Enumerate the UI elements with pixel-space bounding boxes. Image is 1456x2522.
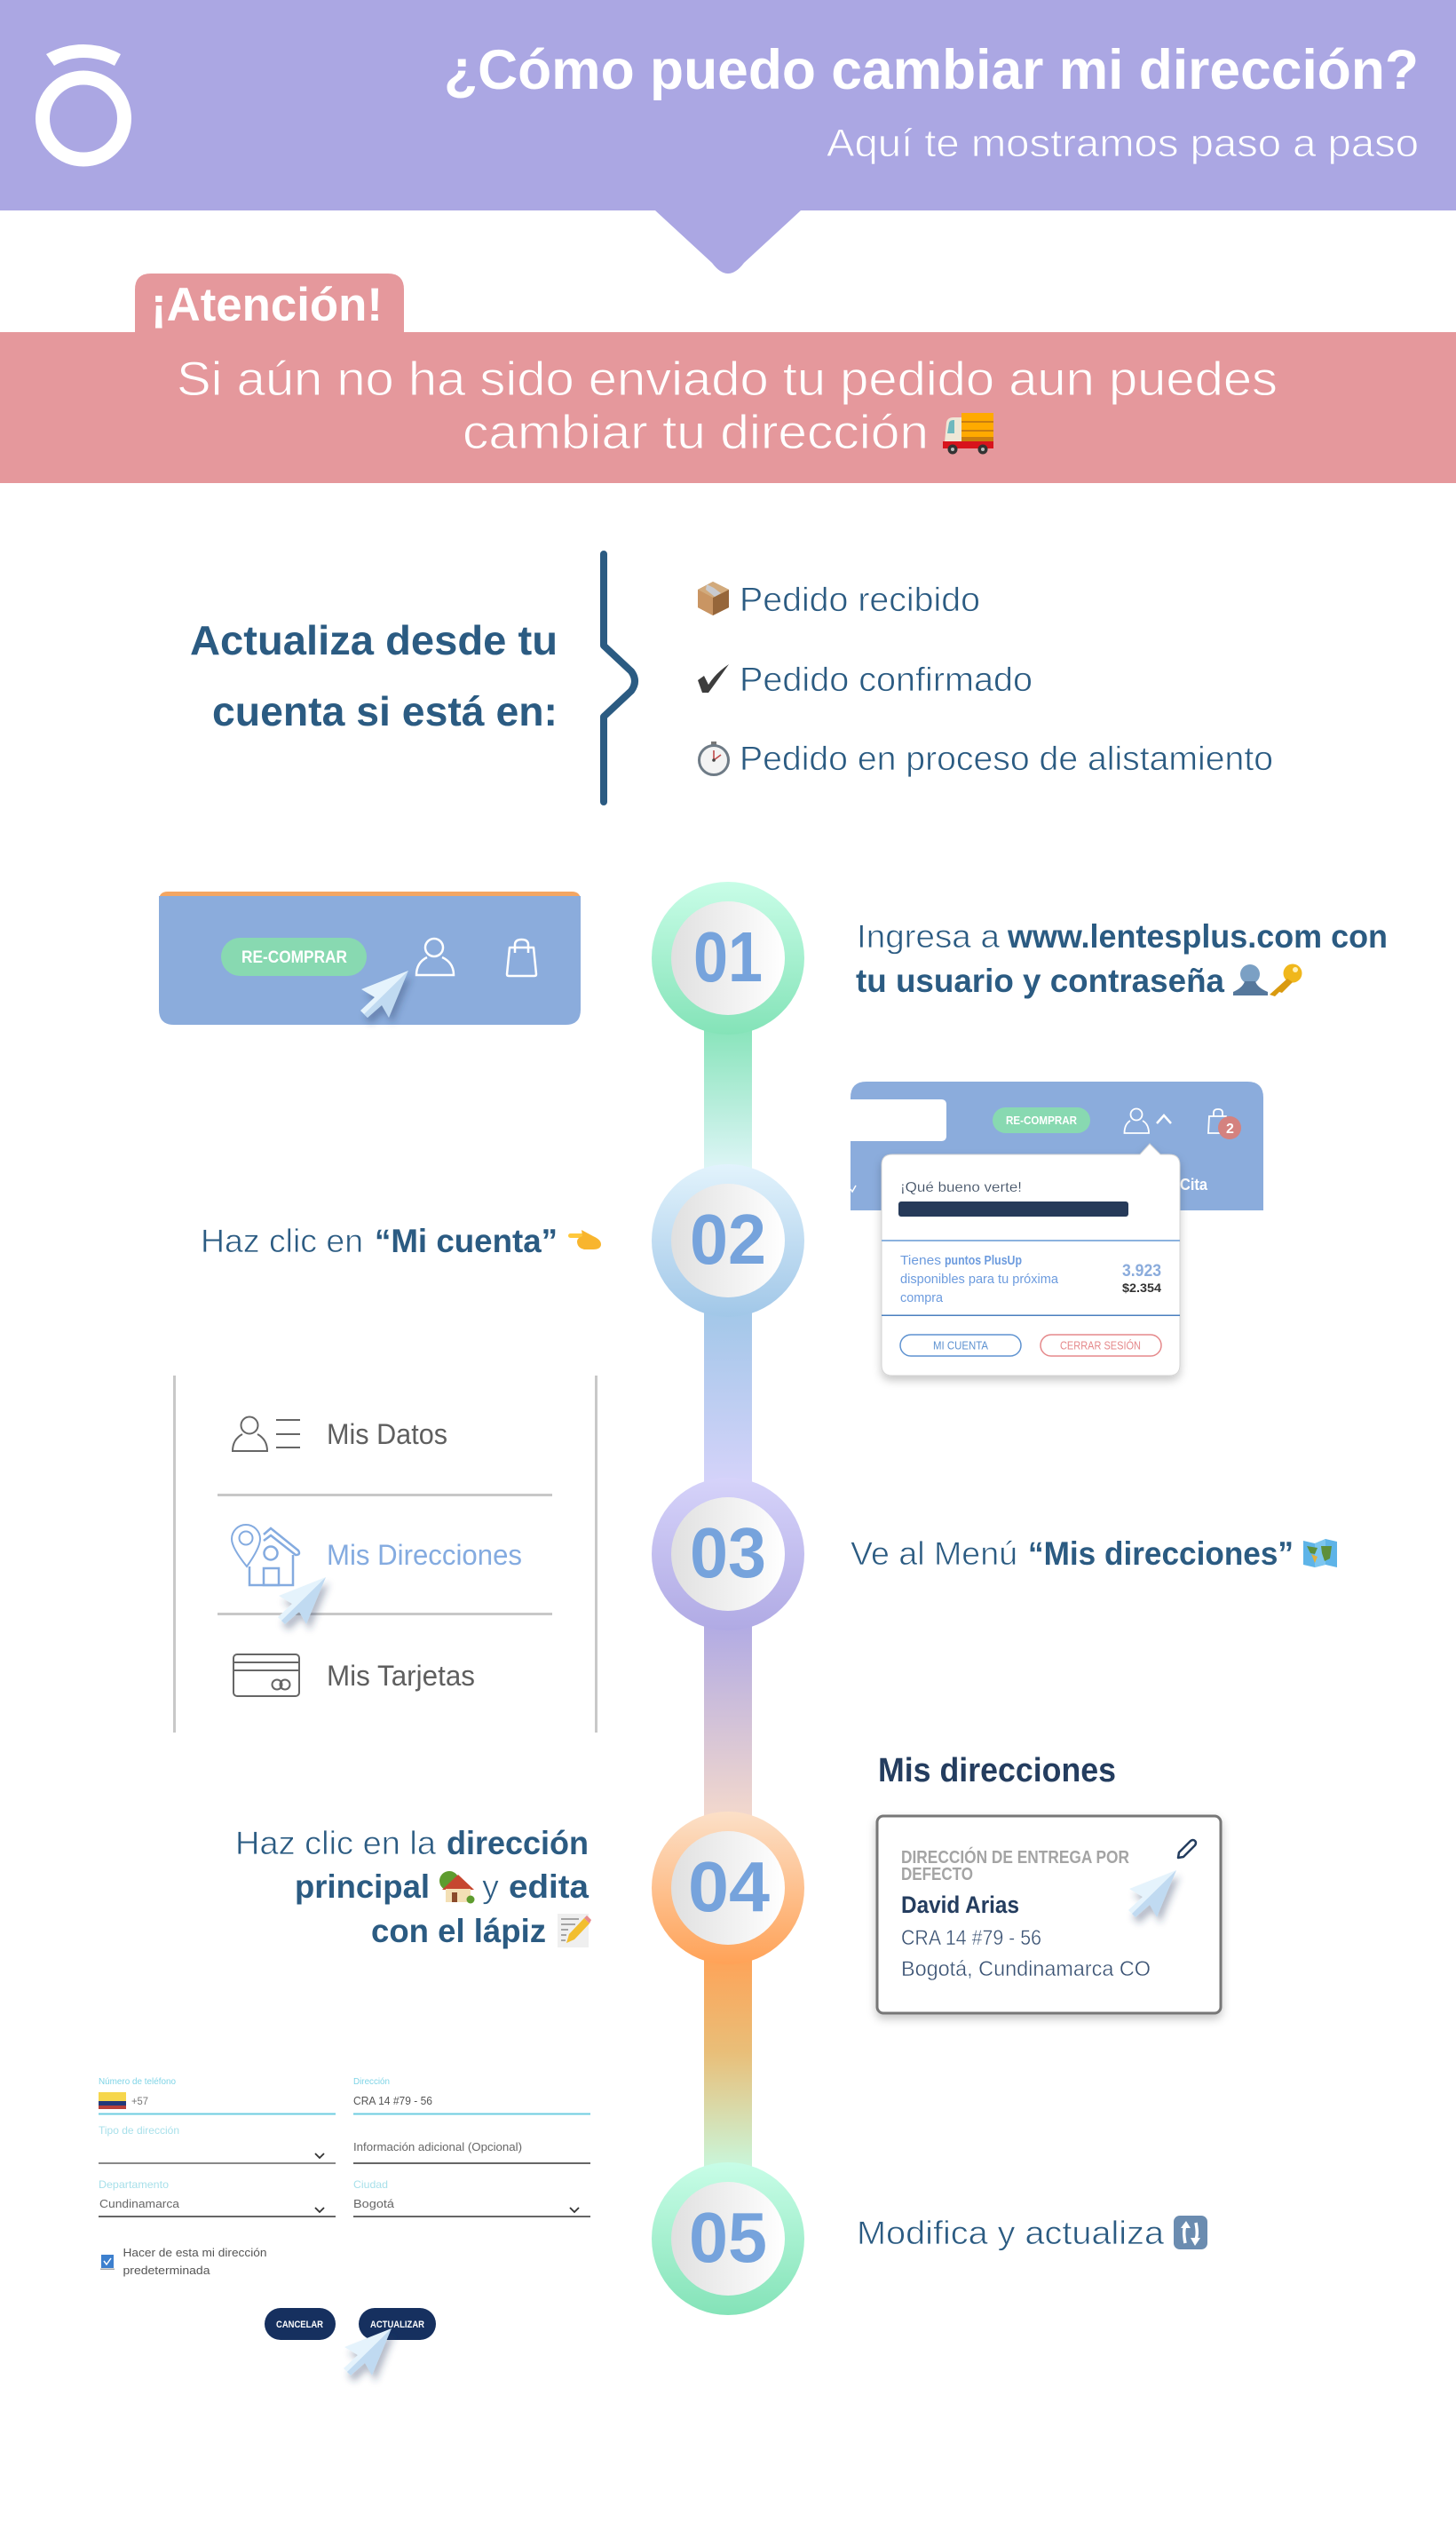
- panel: step 1 navbar screenshot: [159, 892, 581, 1025]
- field: phone: [99, 2076, 336, 2115]
- button: mi cuenta: MI CUENTA: [933, 1339, 989, 1352]
- icon: update arrows: [1174, 2216, 1207, 2249]
- points text: [900, 1254, 1059, 1305]
- attention text: cambiar tu dirección: [463, 406, 929, 459]
- text: step 5: Modifica y actualiza: [857, 2215, 1164, 2251]
- step marker 02: [652, 1164, 804, 1317]
- field: address: CRA 14 #79 - 56: [353, 2095, 432, 2107]
- address card: [877, 1816, 1221, 2013]
- text: step 4: [235, 1825, 589, 1949]
- panel: step 3 account menu: [173, 1376, 597, 1733]
- icon: memo with pencil: [558, 1914, 591, 1947]
- field: address type: [99, 2124, 336, 2164]
- checkbox: default address: predeterminada: [123, 2264, 210, 2277]
- field: additional info: Información adicional (Opcional): [353, 2141, 522, 2153]
- heading: attention: ¡Atención!: [151, 279, 383, 331]
- button: actualizar: [359, 2308, 436, 2340]
- field: city: Ciudad: [353, 2178, 388, 2191]
- panel: step 4 address card: [877, 1752, 1221, 2013]
- heading: update from account: cuenta si está en:: [212, 688, 558, 734]
- points text: puntos PlusUp: [945, 1254, 1022, 1268]
- address details: DEFECTO: [901, 1865, 973, 1884]
- field: city: Bogotá: [353, 2198, 394, 2210]
- status: in preparation: Pedido en proceso de alistamiento: [740, 741, 1273, 778]
- field: department: [99, 2178, 336, 2217]
- heading: mis direcciones: Mis direcciones: [878, 1752, 1116, 1789]
- menu item: mis tarjetas: Mis Tarjetas: [327, 1660, 475, 1692]
- timeline connector bars: [704, 1021, 752, 2171]
- button: actualizar: ACTUALIZAR: [370, 2320, 424, 2330]
- button: re-comprar small: RE-COMPRAR: [1006, 1114, 1078, 1127]
- icon: cart with badge: 2: [1226, 1122, 1234, 1137]
- step marker 01: 01: [693, 917, 763, 996]
- checkbox: default address: Hacer de esta mi dirección: [123, 2246, 266, 2259]
- panel: attention banner: [0, 274, 1456, 483]
- address details: CRA 14 #79 - 56: [901, 1926, 1041, 1950]
- menu item: mis direcciones: Mis Direcciones: [327, 1539, 522, 1571]
- button: cancelar: [265, 2308, 336, 2340]
- text: step 1: tu usuario y contraseña: [856, 963, 1224, 999]
- field: department: Departamento: [99, 2178, 169, 2191]
- button: cerrar sesion: [1041, 1335, 1161, 1356]
- points text: disponibles para tu próxima: [900, 1273, 1059, 1287]
- points value: [1122, 1262, 1161, 1295]
- text: step 3: “Mis direcciones”: [1028, 1535, 1294, 1572]
- points text: Tienes: [900, 1254, 941, 1268]
- menu item: mis datos: Mis Datos: [327, 1418, 447, 1450]
- field: phone: Número de teléfono: [99, 2076, 176, 2087]
- search box: [851, 1099, 946, 1141]
- icon: cursor: [1128, 1870, 1176, 1917]
- dropdown card: [882, 1144, 1180, 1376]
- icon: user: [416, 939, 454, 975]
- icon: cart with badge: [1208, 1109, 1241, 1139]
- points value: $2.354: [1122, 1281, 1161, 1295]
- text: step 4: dirección: [447, 1825, 589, 1861]
- brace: [604, 554, 635, 802]
- status: confirmed: Pedido confirmado: [740, 662, 1033, 699]
- icon: cursor: [278, 1577, 326, 1624]
- panel: header banner: [0, 0, 1456, 274]
- text: step 3: Ve al Menú: [851, 1535, 1017, 1572]
- button: re-comprar: RE-COMPRAR: [241, 948, 347, 967]
- icon: house with tree: [439, 1871, 474, 1904]
- step marker 04: [652, 1812, 804, 1964]
- greeting: ¡Qué bueno verte!: [900, 1180, 1022, 1195]
- button: cancelar: CANCELAR: [276, 2320, 323, 2330]
- panel: order status section: [190, 554, 1273, 802]
- attention text: Si aún no ha sido enviado tu pedido aun puedes: [177, 353, 1278, 406]
- address details: David Arias: [901, 1892, 1019, 1918]
- text: step 4: con el lápiz: [371, 1913, 546, 1949]
- checkbox: default address: [100, 2246, 266, 2277]
- menu item: mis direcciones: [232, 1525, 522, 1585]
- text: step 3: [851, 1535, 1294, 1572]
- nav label: cita: Cita: [1180, 1176, 1208, 1194]
- address details: [901, 1846, 1151, 1981]
- text: step 4: edita: [509, 1868, 589, 1905]
- attention text: [177, 353, 1278, 459]
- menu item: mis datos: [233, 1417, 447, 1451]
- icon: cursor: [360, 971, 408, 1018]
- icon: logo: [43, 44, 124, 160]
- icon: world map: [1303, 1539, 1337, 1567]
- field: department: Cundinamarca: [99, 2198, 179, 2210]
- step marker 01: [652, 882, 804, 1035]
- text: step 4: Haz clic en la: [235, 1825, 436, 1861]
- heading: update from account: Actualiza desde tu: [190, 617, 558, 663]
- field: phone: +57: [131, 2095, 148, 2107]
- subtitle: Aquí te mostramos paso a paso: [827, 122, 1419, 165]
- text: step 1: [856, 918, 1388, 999]
- step marker 05: 05: [689, 2198, 767, 2277]
- icon: shopping bag: [507, 940, 536, 976]
- text: step 1: www.lentesplus.com con: [1007, 918, 1388, 955]
- text: step 2: Haz clic en: [201, 1223, 363, 1259]
- button: cerrar sesion: CERRAR SESIÓN: [1060, 1339, 1141, 1352]
- icon: user with chevron: [1124, 1108, 1171, 1133]
- icon: cursor: [344, 2328, 392, 2375]
- navbar background: [851, 1082, 1263, 1210]
- button: re-comprar: [221, 938, 367, 976]
- button: mi cuenta: [900, 1335, 1021, 1356]
- icon: pointing hand: [568, 1230, 601, 1249]
- icon: person and key: [1233, 964, 1302, 996]
- step marker 03: 03: [690, 1513, 766, 1592]
- panel: step 2 account dropdown screenshot: [851, 1082, 1263, 1376]
- icon: delivery truck: [943, 413, 993, 455]
- heading: update from account: [190, 617, 558, 734]
- button: re-comprar small: [993, 1107, 1090, 1133]
- text: step 4: principal: [295, 1868, 430, 1905]
- step marker 05: [652, 2162, 804, 2315]
- step marker 03: [652, 1478, 804, 1630]
- status: received: Pedido recibido: [740, 582, 980, 619]
- points value: 3.923: [1122, 1262, 1161, 1281]
- text: step 2: [201, 1223, 558, 1259]
- field: address: [353, 2076, 590, 2115]
- field: city: [353, 2178, 590, 2217]
- panel: step 5 address form: [99, 2076, 590, 2375]
- step marker 02: 02: [690, 1200, 766, 1279]
- text: step 4: y: [482, 1868, 500, 1905]
- redacted name: [898, 1202, 1128, 1217]
- field: address type: Tipo de dirección: [99, 2124, 179, 2137]
- text: step 1: Ingresa a: [857, 918, 1000, 955]
- step marker 04: 04: [688, 1847, 771, 1926]
- address details: DIRECCIÓN DE ENTREGA POR: [901, 1846, 1129, 1868]
- title: ¿Cómo puedo cambiar mi dirección?: [444, 39, 1419, 101]
- menu item: mis tarjetas: [233, 1654, 475, 1696]
- address details: Bogotá, Cundinamarca CO: [901, 1957, 1151, 1981]
- text: step 2: “Mi cuenta”: [375, 1223, 558, 1259]
- field: address: Dirección: [353, 2076, 390, 2087]
- points text: compra: [900, 1291, 944, 1305]
- icon: pencil: [1178, 1840, 1196, 1858]
